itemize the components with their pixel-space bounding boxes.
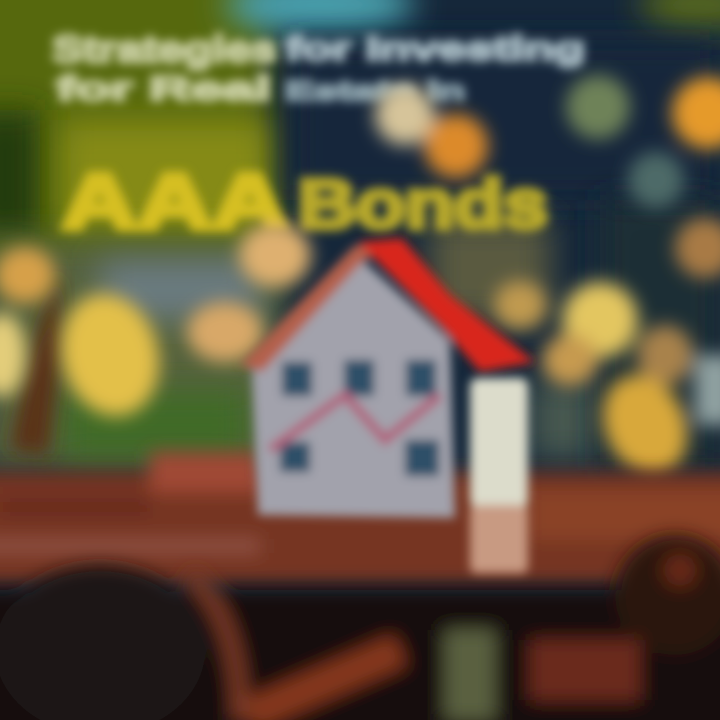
heading text — [52, 29, 585, 108]
house roof left — [240, 245, 380, 372]
house body — [252, 256, 455, 518]
house — [240, 238, 535, 518]
lower dark foreground — [0, 535, 720, 720]
icons: right coins — [494, 281, 720, 489]
tree trunk — [10, 270, 60, 455]
house windows — [280, 360, 439, 476]
house roof right — [358, 238, 535, 372]
heading text: Strategies — [52, 29, 277, 71]
heading: yellow title: Bonds — [298, 165, 548, 243]
white column — [470, 378, 528, 573]
table — [0, 452, 720, 584]
heading text: Estate in — [285, 75, 465, 106]
icons: left coins — [0, 223, 311, 427]
heading: yellow title: AAA — [62, 157, 287, 245]
heading text: for Investing — [285, 30, 585, 68]
icons: upper coins — [375, 75, 720, 278]
house chart line — [270, 395, 440, 450]
heading text: for Real — [56, 70, 271, 108]
heading: yellow title — [62, 157, 548, 245]
